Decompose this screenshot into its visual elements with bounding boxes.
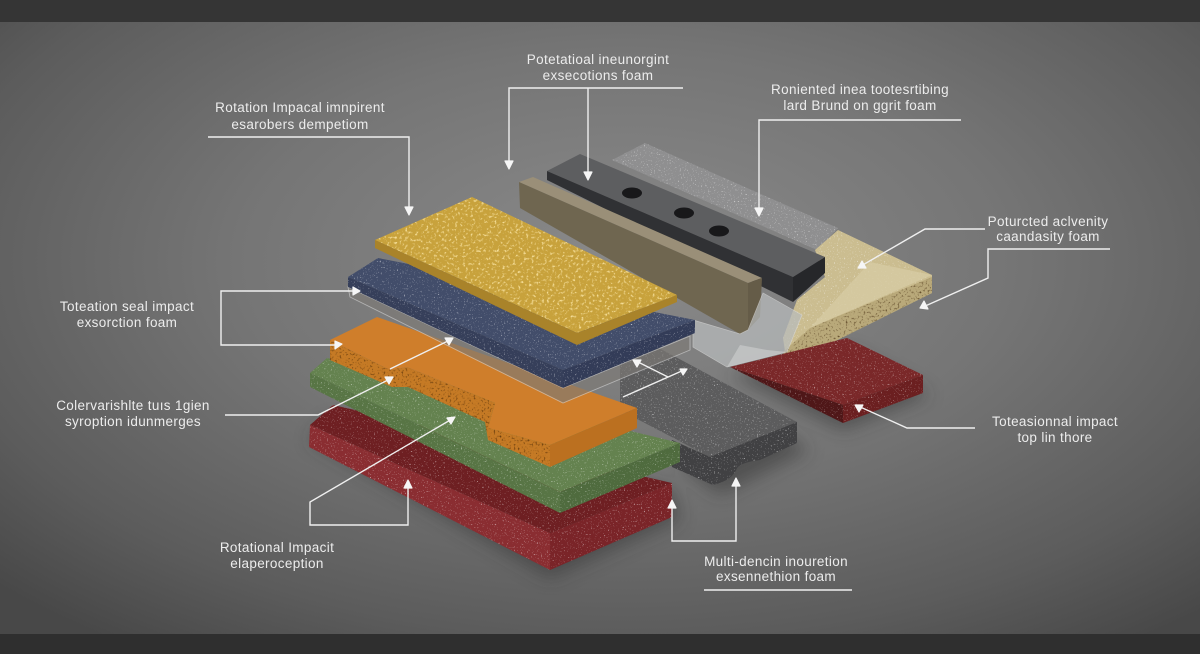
layer: orange foam bbox=[330, 317, 637, 467]
callout: top centre: Potetatioal ineunorgint bbox=[527, 52, 669, 67]
icon: hole bbox=[622, 188, 642, 198]
callout: right lower bbox=[855, 405, 1118, 445]
callout: double arrows bbox=[623, 360, 687, 397]
callout: right upper: Poturcted aclvenity bbox=[988, 214, 1108, 229]
callout: left upper: exsorction foam bbox=[77, 315, 177, 330]
layer: green foam bbox=[310, 358, 680, 513]
callout: bottom left: Rotational Impacit bbox=[220, 540, 334, 555]
callout: top left bbox=[208, 100, 413, 215]
layer: light grey sheet bbox=[612, 143, 838, 250]
bottom band bbox=[0, 634, 1200, 654]
callout: right lower: Toteasionnal impact bbox=[992, 414, 1118, 429]
callout: right lower: top lin thore bbox=[1017, 430, 1093, 445]
top band bbox=[0, 0, 1200, 22]
layer: gold foam bbox=[375, 197, 677, 345]
layer: red base foam bbox=[309, 405, 672, 570]
callout: top centre: exsecotions foam bbox=[543, 68, 653, 83]
callout: left upper bbox=[60, 287, 360, 349]
callout: bottom right: Multi-dencin inouretion bbox=[704, 554, 848, 569]
callout: bottom right bbox=[668, 478, 852, 590]
callout: top left: Rotation Impacal imnpirent bbox=[215, 100, 385, 115]
callout: right upper: caandasity foam bbox=[996, 229, 1100, 244]
layer: taupe bar bbox=[519, 177, 762, 334]
layer: beige wedge foam bbox=[783, 230, 932, 365]
glass sheet bbox=[348, 287, 690, 403]
layer: clear glass block bbox=[693, 293, 802, 367]
callout: left middle: syroption idunmerges bbox=[65, 414, 201, 429]
callout: bottom left bbox=[220, 417, 455, 571]
callout: left middle: Colervarishlte tuıs 1gien bbox=[56, 398, 210, 413]
callout: left upper: Toteation seal impact bbox=[60, 299, 194, 314]
layer: blue foam bbox=[348, 258, 695, 388]
layer: small red foam bbox=[730, 338, 923, 423]
callout: top right: lard Brund on ggrit foam bbox=[783, 98, 937, 113]
callout: left middle bbox=[56, 338, 453, 429]
icon: hole bbox=[709, 226, 729, 236]
callout: bottom right: exsennethion foam bbox=[716, 569, 836, 584]
callout: top right bbox=[755, 82, 961, 216]
layer: dark speckled foam bbox=[620, 347, 797, 485]
shadows bbox=[309, 350, 930, 578]
callout: top right: Roniented inea tootesrtibing bbox=[771, 82, 949, 97]
callout: top centre bbox=[505, 52, 683, 180]
layer: dark grey bar with holes bbox=[547, 154, 825, 302]
callout: right upper bbox=[858, 214, 1110, 309]
callout: top left: esarobers dempetiom bbox=[231, 117, 369, 132]
callout: bottom left: elaperoception bbox=[230, 556, 324, 571]
icon: hole bbox=[674, 208, 694, 218]
